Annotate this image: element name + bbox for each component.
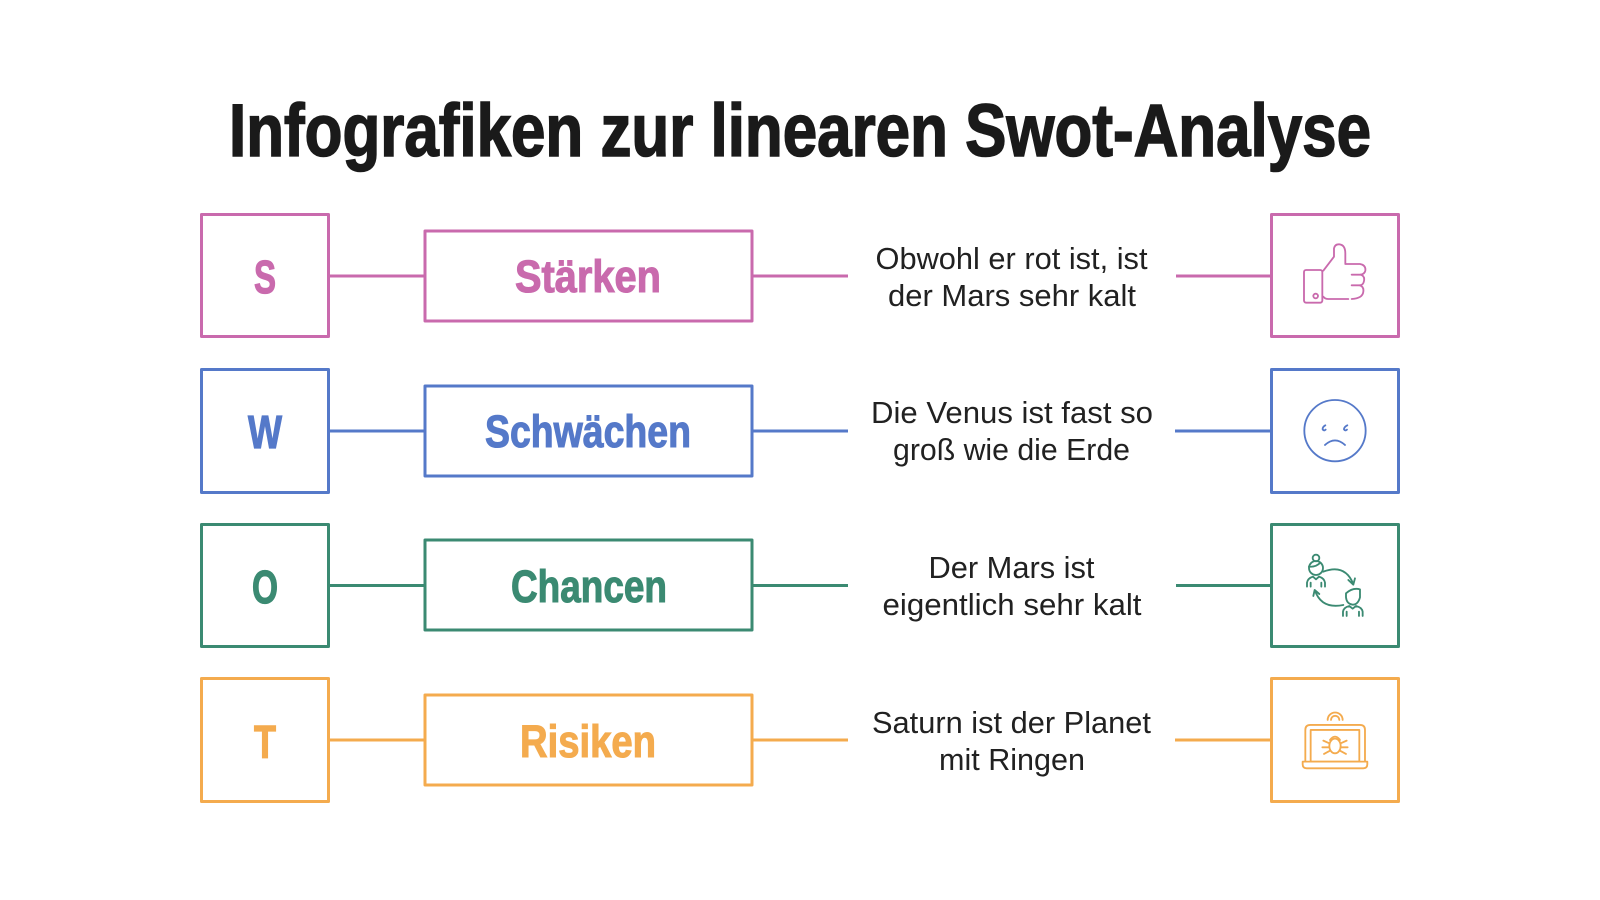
description text: Der Mars ist <box>928 550 1095 585</box>
letter box W: W <box>248 406 282 458</box>
label box Schwächen <box>425 386 752 476</box>
label box Chancen: Chancen <box>511 561 667 612</box>
letter box T <box>202 678 328 802</box>
label box Risiken <box>425 695 752 785</box>
letter box S: S <box>254 251 276 303</box>
description text: Saturn ist der Planet <box>872 705 1151 740</box>
connector lines <box>329 738 1271 742</box>
letter box S <box>202 214 328 336</box>
description text: mit Ringen <box>939 742 1085 777</box>
letter box O: O <box>252 561 278 613</box>
title: Infografiken zur linearen Swot-Analyse <box>229 89 1371 172</box>
description text <box>882 550 1142 622</box>
description text <box>876 241 1148 313</box>
connector lines <box>329 430 1271 432</box>
letter box T: T <box>254 716 276 768</box>
label box Chancen <box>425 540 752 630</box>
description text <box>872 705 1151 777</box>
label box Schwächen: Schwächen <box>485 406 691 457</box>
letter box W <box>202 370 328 492</box>
description text: Die Venus ist fast so <box>871 395 1153 430</box>
panel: row W Schwächen <box>202 370 1398 492</box>
connector lines <box>329 274 1271 278</box>
letter box O <box>202 524 328 646</box>
label box Risiken: Risiken <box>520 716 656 767</box>
icon box: laptop bug <box>1272 678 1398 802</box>
description text <box>871 395 1153 467</box>
icon box: people exchange <box>1272 524 1398 646</box>
panel: row S Stärken <box>202 214 1398 336</box>
description text: Obwohl er rot ist, ist <box>876 241 1148 276</box>
description text: groß wie die Erde <box>893 432 1130 467</box>
icon box: thumbs up <box>1272 214 1398 336</box>
label box Stärken <box>425 231 752 321</box>
description text: der Mars sehr kalt <box>888 278 1136 313</box>
panel: row T Risiken <box>202 678 1398 802</box>
panel: row O Chancen <box>202 524 1398 646</box>
icon box: sad face <box>1272 370 1398 492</box>
description text: eigentlich sehr kalt <box>882 587 1142 622</box>
label box Stärken: Stärken <box>515 251 661 302</box>
connector lines <box>329 584 1271 587</box>
